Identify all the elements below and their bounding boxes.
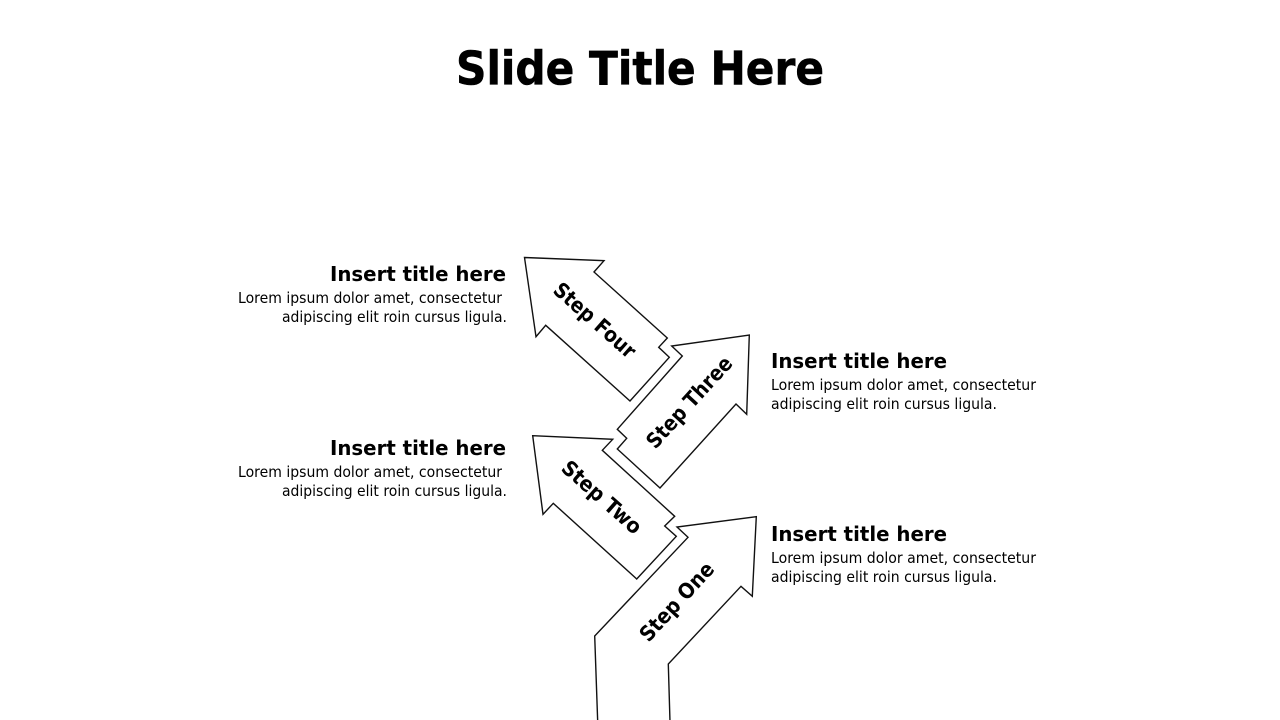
- text block: step two: Insert title here: [330, 436, 506, 460]
- text block: step one: Insert title here: [771, 522, 947, 546]
- text block: step four: [238, 262, 507, 326]
- text block: step two: Lorem ipsum dolor amet, consectetur: [238, 463, 503, 481]
- text block: step four: Insert title here: [330, 262, 506, 286]
- arrow: step four: [524, 258, 669, 401]
- text block: step four: adipiscing elit roin cursus ligula.: [282, 308, 507, 326]
- arrow: step three: Step Three: [641, 351, 737, 453]
- text block: step three: adipiscing elit roin cursus ligula.: [771, 395, 997, 413]
- text block: step three: [771, 349, 1037, 413]
- text block: step two: adipiscing elit roin cursus ligula.: [282, 482, 507, 500]
- arrow: step three: [617, 335, 749, 488]
- arrow: step two: [533, 436, 676, 579]
- text block: step one: adipiscing elit roin cursus ligula.: [771, 568, 997, 586]
- text block: step four: Lorem ipsum dolor amet, consectetur: [238, 289, 503, 307]
- arrow: step one: Step One: [635, 557, 719, 646]
- arrow: step two: Step Two: [557, 456, 647, 539]
- text block: step three: Lorem ipsum dolor amet, consectetur: [771, 376, 1037, 394]
- text block: step one: [771, 522, 1037, 586]
- text block: step two: [238, 436, 507, 500]
- text block: step three: Insert title here: [771, 349, 947, 373]
- arrow: step one: [595, 517, 756, 720]
- text block: step one: Lorem ipsum dolor amet, consectetur: [771, 549, 1037, 567]
- arrow: step four: Step Four: [549, 278, 641, 364]
- title: Slide Title Here: [456, 42, 824, 96]
